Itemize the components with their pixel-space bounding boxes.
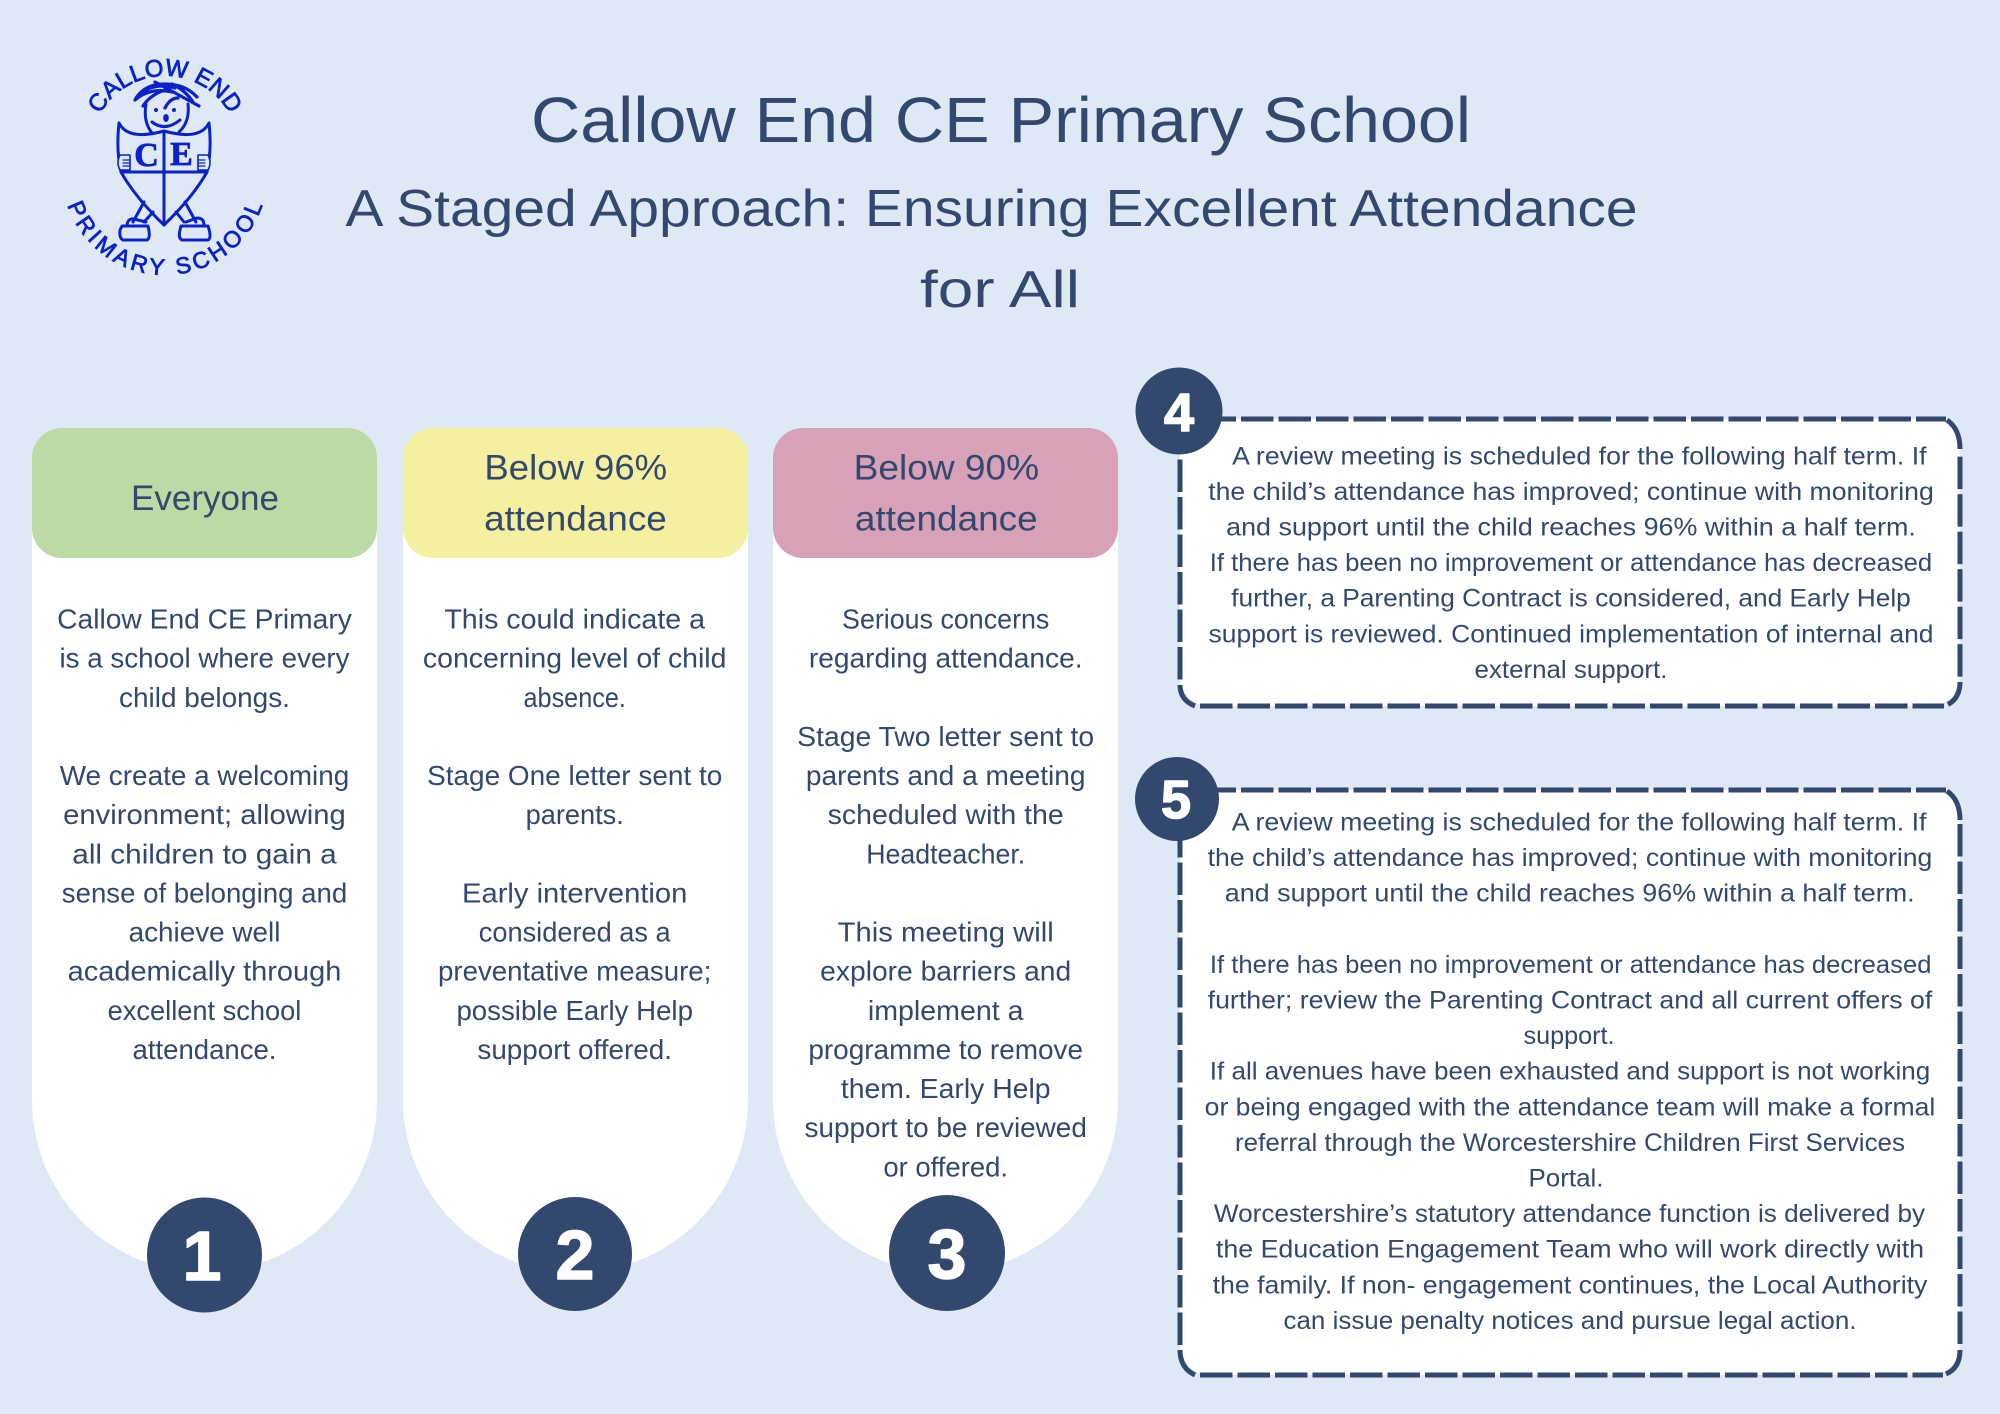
- text block: stage 5 description: can issue penalty notices and pursue legal action.: [1284, 1307, 1856, 1335]
- number badge 5: [1135, 757, 1219, 841]
- text block: stage 1 description: We create a welcoming: [60, 760, 349, 791]
- text block: stage 5 description: the family. If non- engagement continues, the Local Authority: [1213, 1271, 1928, 1299]
- text block: stage 4 description: the child’s attendance has improved; continue with monitoring: [1208, 478, 1934, 506]
- text block: stage 5 description: the Education Engagement Team who will work directly with: [1216, 1236, 1924, 1264]
- text block: stage 1 description: is a school where every: [60, 643, 350, 674]
- text block: stage 3 description: parents and a meeting: [806, 760, 1086, 791]
- text block: stage 3 description: [797, 604, 1094, 1182]
- logo: Callow End school badge: E: [170, 136, 193, 173]
- text block: stage 2 description: Stage One letter sent to: [427, 760, 722, 791]
- text block: stage 2 description: possible Early Help: [456, 995, 693, 1026]
- text block: stage 1 description: sense of belonging and: [62, 877, 347, 908]
- text block: stage 1 description: [57, 604, 352, 1065]
- text block: stage 3 description: them. Early Help: [841, 1073, 1051, 1104]
- text block: stage 2 description: concerning level of child: [423, 643, 726, 674]
- panel body: stage 2: [403, 500, 748, 1273]
- text block: stage 1 description: academically through: [68, 956, 341, 987]
- number badge 3: [889, 1195, 1005, 1311]
- text block: stage 3 description: Serious concerns: [842, 604, 1049, 634]
- panel: stage 4 review box: [1136, 368, 1960, 706]
- text block: stage 3 description: This meeting will: [838, 916, 1054, 948]
- number badge 1: 1: [183, 1217, 221, 1295]
- text block: stage 2 description: support offered.: [477, 1034, 672, 1065]
- text block: stage 2 description: [423, 604, 726, 1065]
- title: school name: Callow End CE Primary School: [531, 84, 1471, 156]
- logo: Callow End school badge: CALLOW END: [89, 58, 240, 111]
- text block: stage 5 description: or being engaged with the attendance team will make a formal: [1205, 1093, 1935, 1121]
- number badge 5: 5: [1161, 770, 1191, 830]
- text block: stage 3 description: or offered.: [883, 1151, 1008, 1182]
- text block: stage 1 description: environment; allowing: [63, 799, 346, 830]
- panel header: Below 90% attendance: attendance: [855, 500, 1038, 539]
- logo: Callow End school badge: PRIMARY SCHOOL: [67, 200, 263, 276]
- text block: stage 3 description: support to be reviewed: [805, 1112, 1087, 1143]
- text block: stage 3 description: programme to remove: [808, 1034, 1083, 1065]
- panel header: Below 90% attendance: Below 90%: [854, 448, 1039, 487]
- text block: stage 1 description: attendance.: [133, 1034, 276, 1065]
- panel body: stage 1: [32, 500, 377, 1273]
- subtitle: staged approach: A Staged Approach: Ensuring Excellent Attendance: [346, 180, 1638, 238]
- text block: stage 5 description: A review meeting is scheduled for the following half term. If: [1232, 808, 1926, 836]
- text block: stage 1 description: child belongs.: [119, 682, 290, 713]
- text block: stage 4 description: and support until the child reaches 96% within a half term.: [1226, 514, 1916, 542]
- text block: stage 5 description: If there has been no improvement or attendance has decreased: [1210, 951, 1931, 979]
- text block: stage 2 description: This could indicate a: [444, 604, 705, 634]
- logo: Callow End school badge: [67, 58, 263, 276]
- text block: stage 1 description: excellent school: [108, 995, 301, 1026]
- subtitle: staged approach: [346, 180, 1638, 319]
- text block: stage 3 description: explore barriers and: [820, 956, 1071, 987]
- text block: stage 4 description: external support.: [1475, 656, 1667, 684]
- panel header: Below 96% attendance: [403, 428, 748, 558]
- text block: stage 3 description: Stage Two letter sent to: [797, 721, 1094, 752]
- text block: stage 3 description: implement a: [868, 995, 1024, 1026]
- text block: stage 4 description: [1208, 442, 1934, 684]
- panel: stage 5 review box: [1135, 757, 1960, 1375]
- text block: stage 4 description: A review meeting is scheduled for the following half term. If: [1232, 442, 1927, 470]
- text block: stage 5 description: and support until the child reaches 96% within a half term.: [1225, 880, 1915, 908]
- text block: stage 1 description: all children to gain a: [72, 838, 337, 869]
- text block: stage 1 description: achieve well: [129, 916, 280, 948]
- text block: stage 5 description: support.: [1524, 1022, 1614, 1050]
- text block: stage 4 description: support is reviewed. Continued implementation of internal and: [1208, 620, 1934, 648]
- text block: stage 3 description: regarding attendance.: [809, 643, 1083, 674]
- number badge 2: [518, 1197, 632, 1311]
- panel header: Below 96% attendance: Below 96%: [484, 448, 667, 487]
- number badge 4: 4: [1164, 383, 1194, 443]
- text block: stage 2 description: parents.: [526, 799, 624, 830]
- text block: stage 2 description: considered as a: [479, 916, 671, 948]
- text block: stage 5 description: Worcestershire’s statutory attendance function is delivered by: [1214, 1200, 1926, 1228]
- text block: stage 5 description: referral through the Worcestershire Children First Services: [1235, 1129, 1905, 1157]
- text block: stage 3 description: Headteacher.: [866, 838, 1025, 869]
- text block: stage 1 description: Callow End CE Primary: [57, 604, 352, 634]
- number badge 1: [147, 1198, 262, 1312]
- text block: stage 2 description: absence.: [524, 682, 626, 713]
- subtitle: staged approach: for All: [920, 261, 1080, 319]
- text block: stage 2 description: Early intervention: [462, 877, 687, 908]
- text block: stage 5 description: further; review the Parenting Contract and all current offers of: [1208, 986, 1932, 1014]
- panel: stage 2 Below 96%: [403, 428, 748, 1311]
- panel: stage 1 Everyone: [32, 428, 377, 1312]
- text block: stage 4 description: If there has been no improvement or attendance has decreased: [1210, 549, 1932, 577]
- panel: stage 3 Below 90%: [773, 428, 1118, 1311]
- text block: stage 5 description: Portal.: [1528, 1164, 1604, 1192]
- text block: stage 3 description: scheduled with the: [828, 799, 1064, 830]
- number badge 3: 3: [928, 1215, 966, 1293]
- number badge 4: [1136, 368, 1222, 454]
- panel body: stage 3: [773, 500, 1118, 1273]
- number badge 2: 2: [556, 1216, 594, 1294]
- panel header: Everyone: Everyone: [131, 479, 279, 518]
- panel header: Below 96% attendance: attendance: [484, 500, 667, 539]
- dashed box 4: [1180, 419, 1960, 706]
- logo: Callow End school badge: C: [134, 137, 159, 174]
- text block: stage 5 description: the child’s attendance has improved; continue with monitoring: [1208, 844, 1932, 872]
- text block: stage 5 description: If all avenues have been exhausted and support is not working: [1210, 1058, 1930, 1086]
- text block: stage 4 description: further, a Parenting Contract is considered, and Early Help: [1231, 585, 1911, 613]
- panel header: Below 90% attendance: [773, 428, 1118, 558]
- text block: stage 5 description: [1205, 808, 1935, 1335]
- dashed box 5: [1180, 790, 1960, 1375]
- panel header: Everyone: [32, 428, 377, 558]
- text block: stage 2 description: preventative measure;: [438, 956, 711, 987]
